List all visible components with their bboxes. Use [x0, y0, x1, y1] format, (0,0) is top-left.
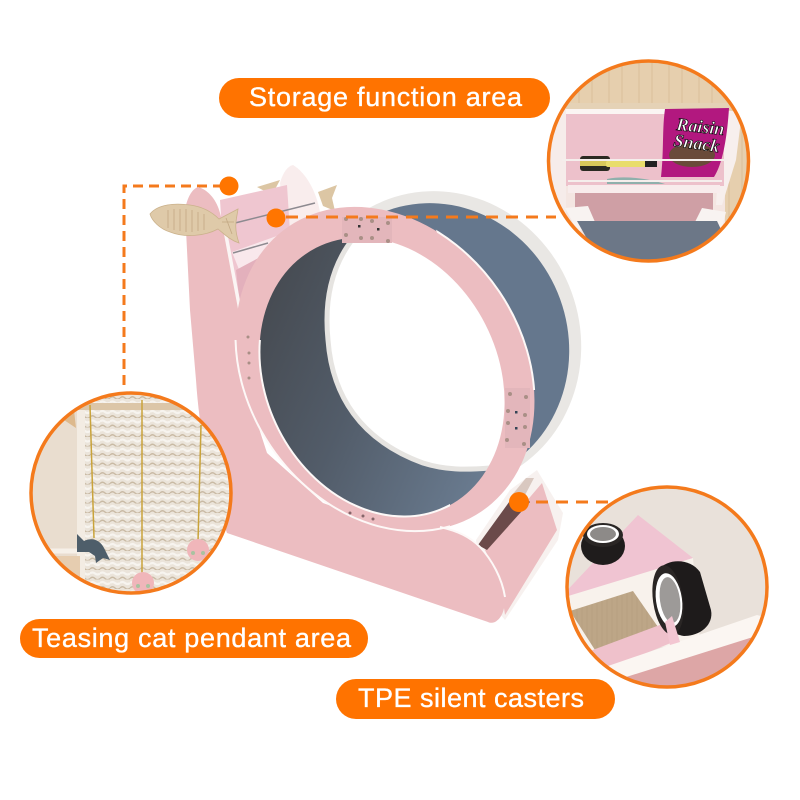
callout dot: storage — [266, 208, 286, 228]
fish pendant — [77, 534, 110, 563]
dashed connector: casters — [536, 500, 612, 504]
bolt plates — [246, 217, 530, 520]
inset: storage shelf photo — [545, 55, 755, 262]
ring highlight lines — [174, 149, 596, 597]
callout dot: pendant area — [220, 176, 238, 196]
large caster — [648, 561, 711, 637]
snack bag: Snack — [672, 130, 721, 156]
pendant strings — [90, 400, 201, 575]
wheel rim and back felt — [257, 151, 623, 529]
storage shelf — [220, 185, 315, 306]
snack bag — [661, 108, 729, 177]
callout dot: casters — [509, 492, 529, 512]
dashed connector: pendant area — [124, 186, 222, 385]
paw balls — [132, 539, 209, 594]
dashed connector: storage — [286, 216, 556, 218]
small caster — [581, 523, 625, 565]
label: storage function area — [219, 78, 550, 118]
left support — [185, 187, 505, 623]
label: TPE silent casters: TPE silent casters — [358, 683, 584, 713]
inset: teasing pendants photo — [30, 390, 240, 600]
front wheel ring — [236, 206, 534, 530]
fish ornament — [150, 204, 239, 243]
support white edge — [225, 230, 240, 310]
brush and pen — [580, 156, 657, 171]
snack bag: Raisin — [675, 114, 725, 139]
rear fish — [257, 180, 337, 211]
felt — [577, 221, 726, 262]
back ear panel — [280, 165, 322, 235]
label: TPE silent casters — [336, 679, 615, 719]
caster base — [476, 470, 563, 620]
label: teasing cat pendant area: Teasing cat pendant area — [32, 623, 352, 653]
label: storage function area: Storage function area — [249, 82, 523, 112]
inset: casters photo — [560, 487, 775, 700]
product: pink cat wheel — [150, 165, 582, 623]
felt interior — [176, 151, 594, 587]
wheel opening — [327, 225, 518, 469]
